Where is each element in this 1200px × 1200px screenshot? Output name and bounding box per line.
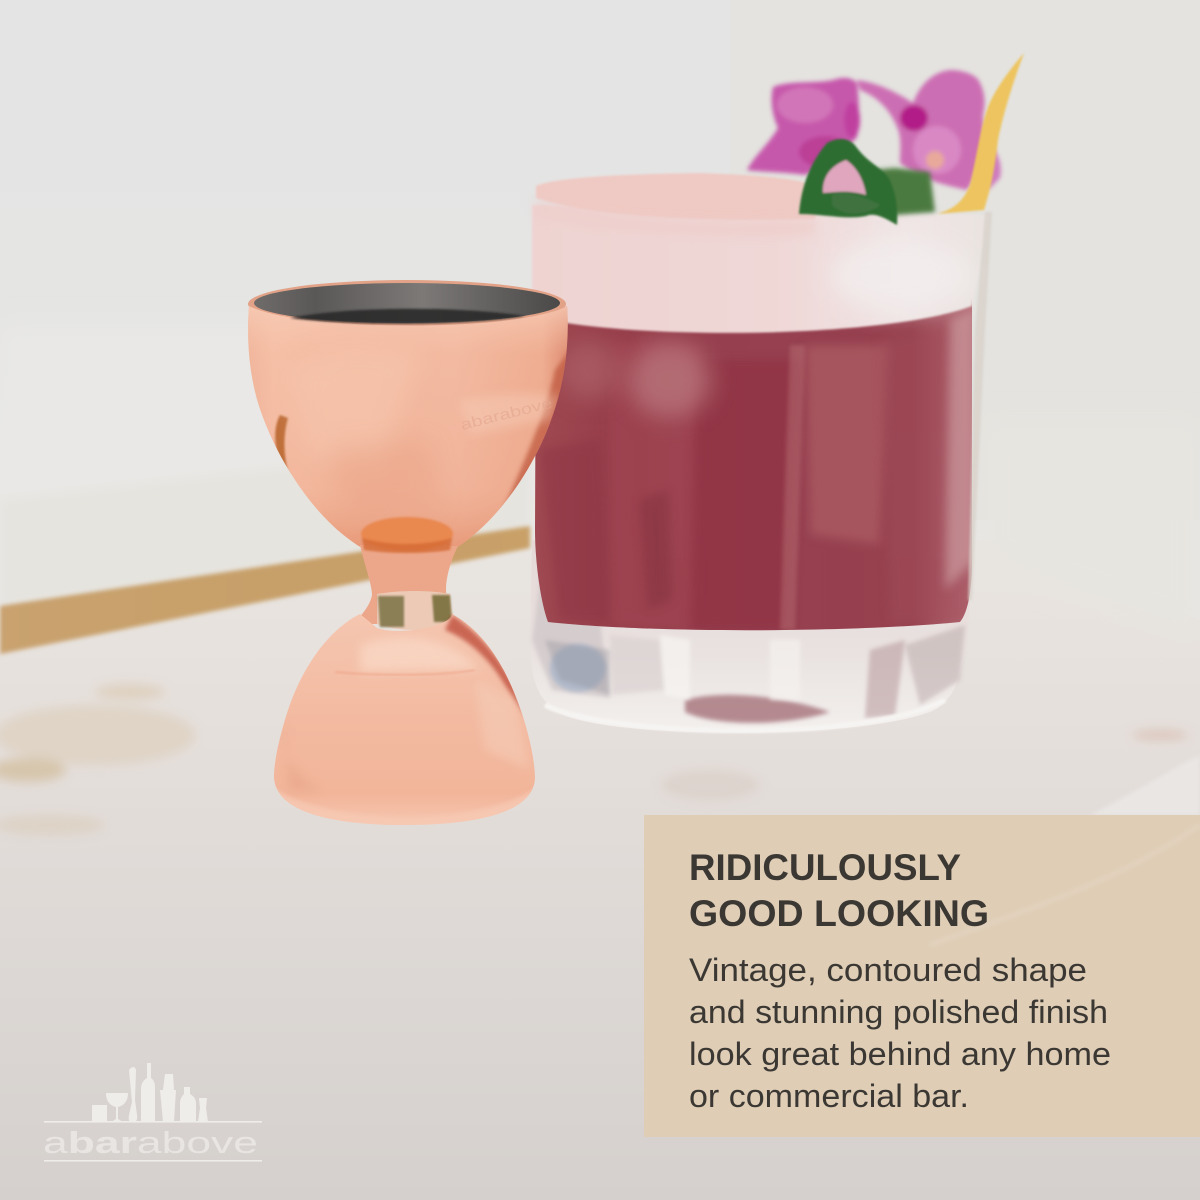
jigger cup xyxy=(245,280,575,550)
jigger neck xyxy=(354,517,458,630)
heading xyxy=(689,847,989,934)
jigger steel interior xyxy=(254,283,560,323)
garnish: orchid flowers xyxy=(747,70,1001,190)
glass base xyxy=(530,520,970,733)
body copy: Vintage, contoured shape xyxy=(689,952,1087,988)
heading: GOOD LOOKING xyxy=(689,893,989,934)
copper jigger xyxy=(245,280,575,830)
marble gold stains xyxy=(0,684,1188,835)
body copy xyxy=(689,952,1111,1114)
garnish: lemon peel xyxy=(937,53,1024,214)
foam xyxy=(532,173,992,600)
body copy: or commercial bar. xyxy=(689,1078,969,1114)
cocktail glass xyxy=(530,53,1024,733)
heading: RIDICULOUSLY xyxy=(689,847,961,888)
jigger base xyxy=(270,614,540,830)
logo icon: bar tools on shelf xyxy=(92,1063,208,1122)
red liquid xyxy=(530,290,980,640)
wooden tray edge xyxy=(0,526,530,654)
logo rules xyxy=(44,1121,262,1123)
garnish: basil leaf xyxy=(799,139,935,225)
body copy: and stunning polished finish xyxy=(689,994,1108,1030)
body copy: look great behind any home xyxy=(689,1036,1111,1072)
etched logo on jigger: abarabove xyxy=(459,395,554,434)
text panel xyxy=(644,815,1200,1137)
logo wordmark: abar above xyxy=(43,1125,258,1160)
brand logo: a bar above xyxy=(43,1063,262,1162)
